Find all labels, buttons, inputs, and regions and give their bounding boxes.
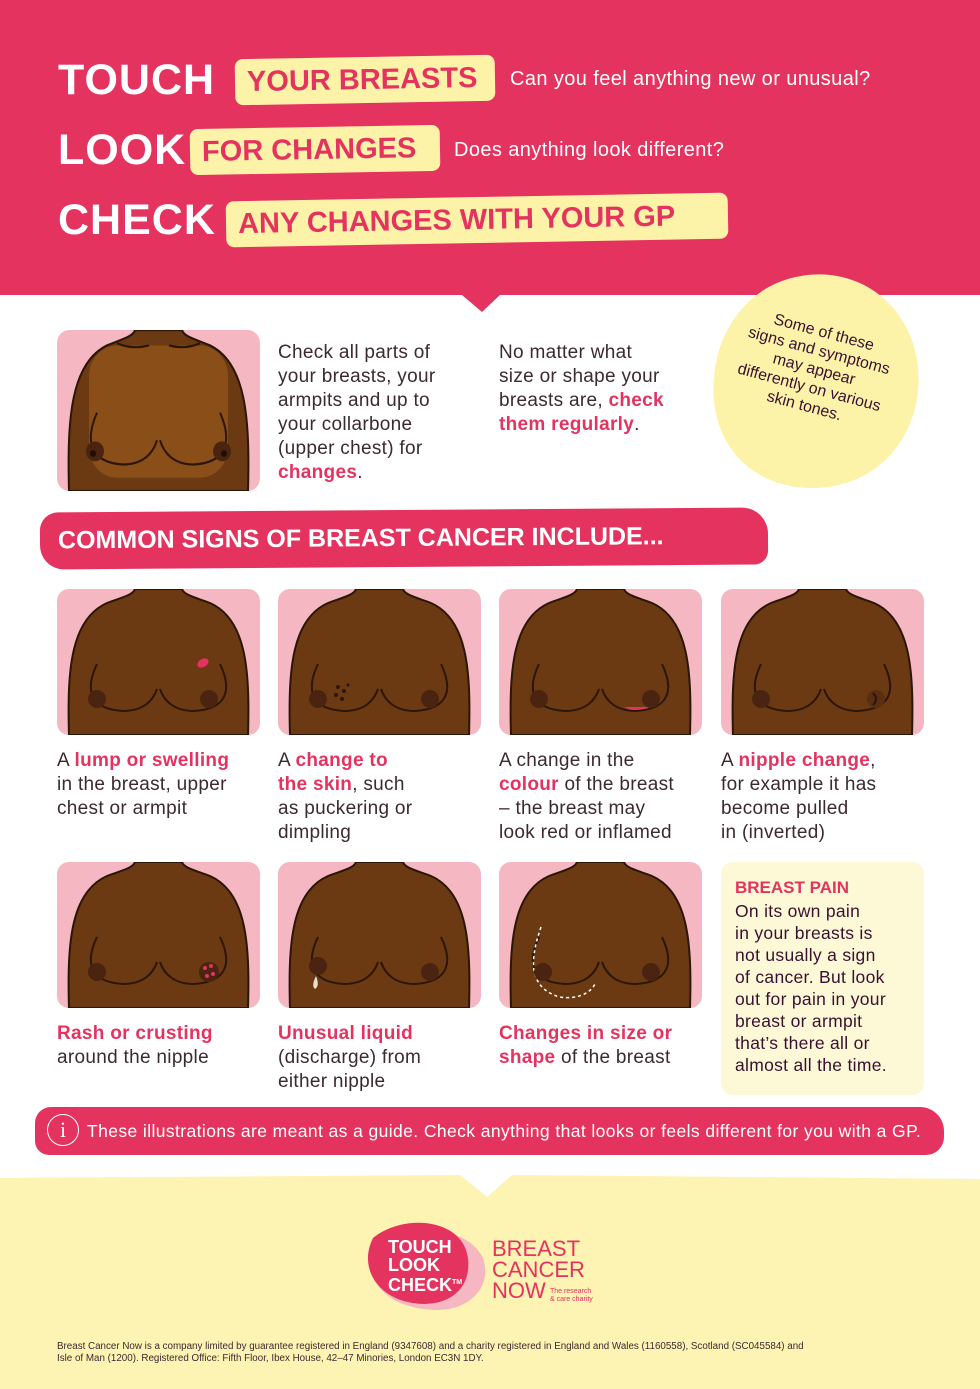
text: check all parts: armpits and up to	[278, 390, 430, 411]
text: discharge	[278, 1023, 421, 1092]
heading: check: CHECK	[58, 196, 216, 244]
panel: breast pain: out for pain in your	[735, 989, 886, 1009]
panel: breast pain: in your breasts is	[735, 923, 873, 943]
text: colour: look red or inflamed	[499, 822, 672, 843]
logo: breast cancer now: The research	[550, 1288, 591, 1295]
text: check all parts: (upper chest) for	[278, 438, 422, 459]
footer band	[0, 1175, 980, 1389]
panel: breast pain: not usually a sign	[735, 945, 876, 965]
text: skin: the skin, such	[278, 774, 405, 795]
banner: common signs	[40, 507, 768, 570]
panel: breast pain: breast or armpit	[735, 1011, 862, 1031]
panel: breast pain: of cancer. But look	[735, 967, 885, 987]
logo: touch look check	[368, 1222, 486, 1310]
callout: skin tones blob: signs and symptoms	[746, 324, 892, 378]
callout: skin tones blob: skin tones.	[765, 388, 843, 424]
text: nipple: in (inverted)	[721, 822, 825, 843]
text: rash: around the nipple	[57, 1047, 209, 1068]
logo: touch look check: CHECKTM	[388, 1275, 462, 1295]
callout: skin tones blob: Some of these	[772, 311, 876, 354]
text: colour	[499, 750, 674, 843]
illustration: lump	[57, 589, 260, 735]
illustration: rash	[57, 862, 260, 1008]
text: skin: as puckering or	[278, 798, 412, 819]
text: colour: A change in the	[499, 750, 634, 771]
text: skin: dimpling	[278, 822, 351, 843]
text: size shape: Changes in size or	[499, 1023, 672, 1044]
logo: touch look check: LOOK	[388, 1255, 440, 1275]
text: no matter what: No matter what	[499, 342, 632, 363]
text: check all parts: your collarbone	[278, 414, 412, 435]
text: colour: – the breast may	[499, 798, 645, 819]
heading: touch: TOUCH	[58, 56, 215, 104]
banner: common signs: COMMON SIGNS OF BREAST CANCER INCLUDE...	[58, 522, 664, 554]
panel: breast pain: almost all the time.	[735, 1055, 887, 1075]
text: no matter what: breasts are, check	[499, 390, 664, 411]
text: rash	[57, 1023, 213, 1068]
text: check all parts: Check all parts of	[278, 342, 430, 363]
illustration: intro torso	[57, 330, 260, 491]
callout: skin tones blob: differently on various	[736, 361, 882, 415]
question look: Does anything look different?	[454, 139, 724, 161]
text: rash: Rash or crusting	[57, 1023, 213, 1044]
heading: look: LOOK	[58, 126, 186, 174]
callout: skin tones blob	[713, 274, 919, 488]
text: no matter what: size or shape your	[499, 366, 660, 387]
text: nipple: for example it has	[721, 774, 876, 795]
text: discharge: (discharge) from	[278, 1047, 421, 1068]
text: size shape: shape of the breast	[499, 1047, 671, 1068]
icon: info: i	[60, 1117, 66, 1142]
text: discharge: Unusual liquid	[278, 1023, 413, 1044]
fine print: Breast Cancer Now is a company limited by guarantee registered in England (9347608) and a charity registered in England and Wales (1160558), Scotland (SC045584) and	[57, 1341, 804, 1352]
logo: touch look check: TOUCH	[388, 1237, 452, 1257]
text: lump: chest or armpit	[57, 798, 187, 819]
text: discharge: either nipple	[278, 1071, 385, 1092]
text: no matter what: them regularly.	[499, 414, 640, 435]
panel: breast pain: that’s there all or	[735, 1033, 870, 1053]
text: size shape	[499, 1023, 672, 1068]
fine print: Isle of Man (1200). Registered Office: Fifth Floor, Ibex House, 42–47 Minories, London EC3N 1DY.	[57, 1353, 484, 1364]
info bar: These illustrations are meant as a guide. Check anything that looks or feels different for you with a GP.	[87, 1121, 921, 1141]
illustration: nipple	[721, 589, 924, 735]
text: nipple	[721, 750, 876, 843]
illustration: skin	[278, 589, 481, 735]
illustration: colour	[499, 589, 702, 735]
text: no matter what	[499, 342, 664, 435]
question touch: Can you feel anything new or unusual?	[510, 68, 871, 90]
text: lump: A lump or swelling	[57, 750, 229, 771]
highlight: for changes	[190, 125, 440, 175]
text: nipple: become pulled	[721, 798, 848, 819]
text: colour: colour of the breast	[499, 774, 674, 795]
highlight: for changes: FOR CHANGES	[202, 132, 417, 168]
logo: breast cancer now: NOW	[492, 1278, 546, 1303]
text: skin	[278, 750, 412, 843]
text: check all parts	[278, 342, 435, 483]
info bar	[35, 1107, 944, 1155]
highlight: your breasts	[235, 55, 495, 105]
highlight: any changes	[226, 193, 728, 247]
text: skin: A change to	[278, 750, 388, 771]
panel: breast pain: BREAST PAIN	[735, 878, 849, 897]
illustration: size shape	[499, 862, 702, 1008]
logo: breast cancer now	[492, 1236, 593, 1303]
fine print	[57, 1341, 804, 1364]
panel: breast pain	[721, 862, 924, 1095]
callout: skin tones blob: may appear	[771, 350, 857, 389]
logo: breast cancer now: & care charity	[550, 1296, 593, 1303]
illustration: discharge	[278, 862, 481, 1008]
text: nipple: A nipple change,	[721, 750, 876, 771]
highlight: your breasts: YOUR BREASTS	[247, 62, 478, 98]
icon: info	[47, 1114, 79, 1146]
logo: breast cancer now: CANCER	[492, 1257, 585, 1282]
text: lump	[57, 750, 229, 819]
header band	[0, 0, 980, 312]
logo: breast cancer now: BREAST	[492, 1236, 580, 1261]
panel: breast pain: On its own pain	[735, 901, 860, 921]
highlight: any changes: ANY CHANGES WITH YOUR GP	[238, 201, 675, 240]
text: check all parts: your breasts, your	[278, 366, 435, 387]
text: lump: in the breast, upper	[57, 774, 227, 795]
text: check all parts: changes.	[278, 462, 363, 483]
